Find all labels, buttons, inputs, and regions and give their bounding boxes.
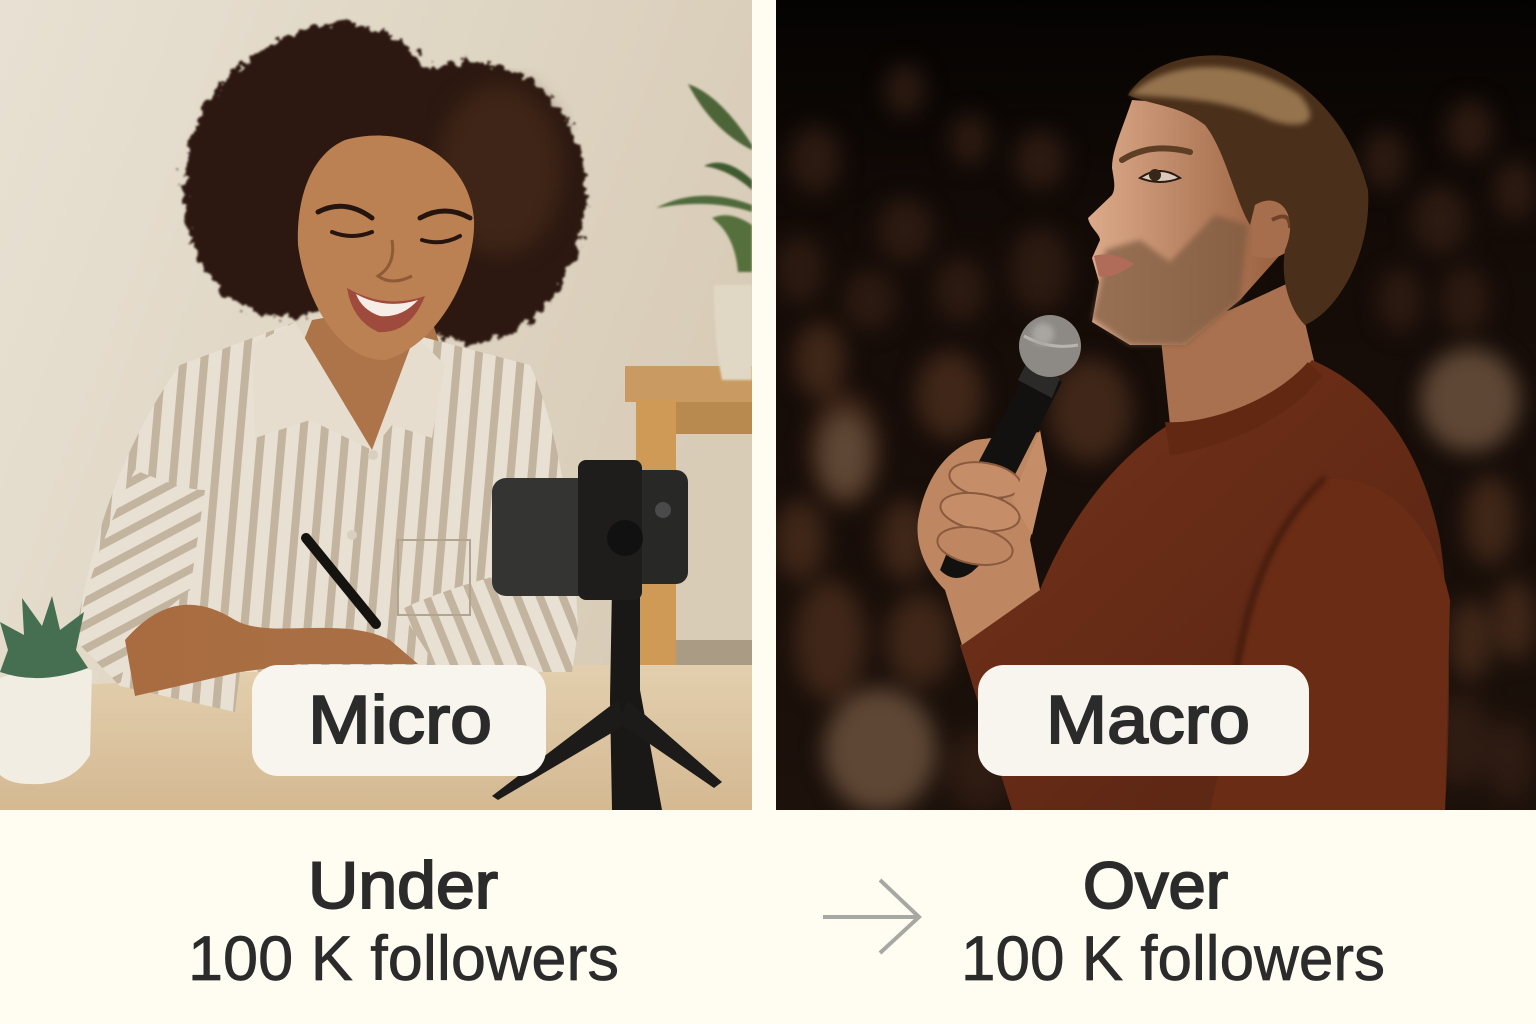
text block: micro threshold <box>188 848 619 994</box>
icon: pen <box>306 538 376 624</box>
tabletop <box>0 665 752 810</box>
woman's neck <box>304 318 439 450</box>
icon: potted plant on side table <box>656 84 752 380</box>
woman's face <box>298 136 474 360</box>
icon: phone on tripod <box>492 460 722 810</box>
text block: macro threshold: Over <box>1083 848 1228 922</box>
eyebrow <box>1122 148 1190 160</box>
text block: macro threshold <box>961 848 1385 994</box>
man's neck <box>1160 280 1315 425</box>
smile <box>347 288 425 332</box>
dark stage background <box>776 0 1536 810</box>
woman's shirt <box>75 322 578 712</box>
icon: microphone <box>940 315 1081 578</box>
mouth <box>1094 254 1134 277</box>
man's sweater <box>960 360 1450 810</box>
man's face <box>1088 100 1300 345</box>
man's hand and wrist <box>917 432 1046 645</box>
woman's hair <box>184 24 586 343</box>
fingers gripping microphone <box>934 430 1047 570</box>
icon: succulent in white pot <box>0 596 92 784</box>
label pill: Macro: Macro <box>1046 682 1250 758</box>
man's hair <box>1128 55 1368 325</box>
nose <box>378 240 412 281</box>
arrow <box>823 880 919 953</box>
text block: micro threshold: Under <box>308 848 498 922</box>
wall <box>0 0 752 684</box>
eye <box>1140 171 1180 182</box>
text block: macro threshold: 100 K followers <box>961 924 1385 994</box>
side table <box>625 366 752 665</box>
beard <box>1092 215 1248 345</box>
panel: macro influencer photo <box>774 0 1536 812</box>
label pill: Macro <box>978 665 1309 776</box>
woman's forearm and hand <box>125 605 418 696</box>
blurred audience <box>774 64 1536 812</box>
panel: micro influencer photo <box>0 0 752 810</box>
hair highlight <box>1130 67 1310 125</box>
label pill: Micro: Micro <box>308 682 492 758</box>
ear <box>1263 200 1290 258</box>
label pill: Micro <box>252 665 546 776</box>
text block: micro threshold: 100 K followers <box>188 924 619 994</box>
eyes and brows <box>318 206 470 242</box>
